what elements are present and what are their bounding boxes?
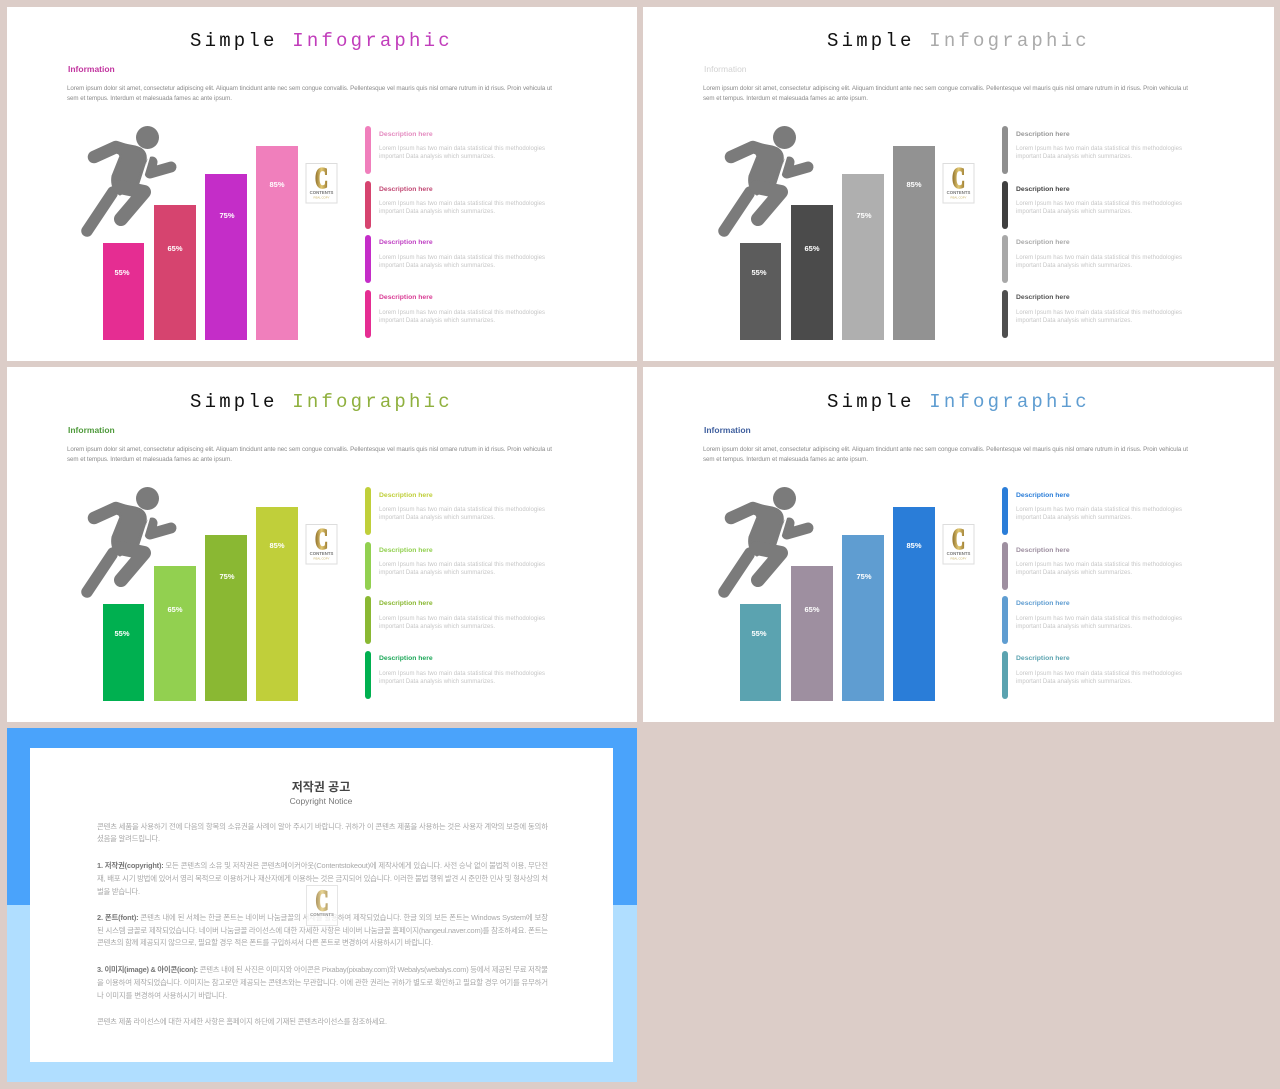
section 2: font: 콘텐츠의 함께 제공되지 않으므로, 필요할 경우 적은 폰트를 구입하셔서 다른 폰트로 변경하여 사용하시기 바랍니다. bbox=[97, 938, 433, 947]
bar: 65%: 65% bbox=[804, 244, 820, 253]
panel: grey infographic bbox=[643, 7, 1274, 361]
section 1: copyright bbox=[97, 861, 548, 896]
logo: CONTENTS bbox=[310, 551, 333, 556]
logo: REAL COPY bbox=[951, 556, 967, 560]
section 3: image and icon: 을 이용하여 제작되었습니다. 이미지는 참고로만 제공되는 콘텐츠와는 무관합니다. 이에 관한 권리는 귀하가 별도로 확인하고 필요할 경우 여기를 유무하거 bbox=[97, 978, 548, 987]
section 3: image and icon: 3. 이미지(image) & 아이콘(icon): 콘텐츠 내에 된 사진은 이미지와 아이콘은 Pixabay(pixabay.com)와 Webalys(webalys.com) 등에서 제공된 무료 저작물 bbox=[97, 965, 548, 974]
description list bbox=[365, 487, 545, 699]
item 1: Lorem Ipsum has two main data statistical this methodologies bbox=[379, 146, 545, 152]
logo: C bbox=[952, 163, 965, 195]
title: Simple Infographic bbox=[190, 30, 453, 52]
item 1: important Data analysis which summarizes. bbox=[379, 515, 495, 521]
section 2: font bbox=[97, 913, 548, 947]
bar: 65%: 65% bbox=[167, 605, 183, 614]
item 1: Description here bbox=[1016, 492, 1070, 499]
bar: 75%: 75% bbox=[219, 211, 235, 220]
item 4 bbox=[1002, 651, 1182, 699]
title: Simple Infographic bbox=[827, 30, 1090, 52]
bar: 75% bbox=[205, 535, 247, 701]
item 3 bbox=[1002, 235, 1182, 283]
item 3: Description here bbox=[379, 239, 433, 246]
item 1: Lorem Ipsum has two main data statistical this methodologies bbox=[1016, 507, 1182, 513]
bar: 65%: 65% bbox=[804, 605, 820, 614]
item 4: Description here bbox=[379, 294, 433, 301]
bar: 85%: 85% bbox=[906, 180, 922, 189]
bar: 65% bbox=[791, 566, 833, 701]
item 2 bbox=[365, 181, 545, 229]
item 4: Lorem Ipsum has two main data statistical this methodologies bbox=[379, 310, 545, 316]
section 2: font: 2. 폰트(font): 콘텐츠 내에 된 서체는 한글 폰트는 네이버 나눔글꼴의 서체를 활용하여 제작되었습니다. 한글 외의 보든 폰트는 Windows System에 보장 bbox=[97, 913, 548, 922]
copyright heading: 저작권 공고 bbox=[292, 779, 350, 794]
item 1: important Data analysis which summarizes. bbox=[1016, 515, 1132, 521]
bar: 55%: 55% bbox=[751, 629, 767, 638]
item 1: Description here bbox=[379, 492, 433, 499]
body text: sem et tempus. Interdum et malesuada fames ac ante ipsum. bbox=[67, 456, 232, 463]
logo: C bbox=[315, 163, 328, 195]
logo bbox=[306, 524, 337, 564]
item 2 bbox=[1002, 542, 1182, 590]
bar: 65% bbox=[154, 566, 196, 701]
logo: CONTENTS bbox=[947, 551, 970, 556]
bar: 65% bbox=[791, 205, 833, 340]
item 4 bbox=[1002, 290, 1182, 338]
bar: 55% bbox=[740, 604, 781, 701]
logo: C bbox=[952, 524, 965, 556]
item 3 bbox=[1002, 596, 1182, 644]
item 2: Lorem Ipsum has two main data statistical this methodologies bbox=[1016, 201, 1182, 207]
item 4: Lorem Ipsum has two main data statistical this methodologies bbox=[1016, 671, 1182, 677]
logo: C bbox=[315, 524, 328, 556]
description list bbox=[1002, 487, 1182, 699]
bar: 75%: 75% bbox=[856, 211, 872, 220]
panel: blue infographic bbox=[643, 367, 1274, 722]
logo bbox=[943, 524, 974, 564]
body text: sem et tempus. Interdum et malesuada fames ac ante ipsum. bbox=[703, 456, 868, 463]
item 1: Description here bbox=[1016, 131, 1070, 138]
copyright subheading: Copyright Notice bbox=[290, 796, 353, 806]
bar: 85% bbox=[893, 146, 935, 340]
bar: 85%: 85% bbox=[906, 541, 922, 550]
item 2: important Data analysis which summarizes. bbox=[379, 570, 495, 576]
body text: Lorem ipsum dolor sit amet, consectetur adipiscing elit. Aliquam tincidunt ante nec sem congue convallis. Pellentesque vel mauris quis nisl ornare rutrum in id risus. Proin vehicula ut bbox=[703, 446, 1188, 453]
item 2: Description here bbox=[379, 547, 433, 554]
body text bbox=[703, 85, 1188, 102]
bar: 75% bbox=[205, 174, 247, 340]
item 3: Description here bbox=[1016, 239, 1070, 246]
item 4: Lorem Ipsum has two main data statistical this methodologies bbox=[1016, 310, 1182, 316]
icon: running figure bbox=[724, 487, 808, 592]
bar: 75% bbox=[842, 174, 884, 340]
closing line: 콘텐츠 제품 라이선스에 대한 자세한 사항은 홈페이지 하단에 기재된 콘텐츠라이선스를 참조하세요. bbox=[97, 1017, 387, 1026]
description list bbox=[365, 126, 545, 338]
logo bbox=[306, 163, 337, 203]
bar: 75% bbox=[842, 535, 884, 701]
item 1 bbox=[365, 487, 545, 535]
item 2: important Data analysis which summarizes. bbox=[1016, 570, 1132, 576]
body text: Lorem ipsum dolor sit amet, consectetur adipiscing elit. Aliquam tincidunt ante nec sem congue convallis. Pellentesque vel mauris quis nisl ornare rutrum in id risus. Proin vehicula ut bbox=[703, 85, 1188, 92]
section 1: copyright: 벌을 받습니다. bbox=[97, 887, 140, 896]
logo: REAL COPY bbox=[314, 196, 330, 200]
description list bbox=[1002, 126, 1182, 338]
intro paragraph: 콘텐츠 세품을 사용하기 전에 다음의 항목의 소유권을 사례이 알아 주시기 바랍니다. 귀하가 이 콘텐츠 제품을 사용하는 것은 사용자 계약의 보증에 동의하 bbox=[97, 822, 548, 831]
panel: pink infographic bbox=[7, 7, 637, 361]
information heading: Information bbox=[68, 425, 115, 435]
item 3: important Data analysis which summarizes. bbox=[1016, 263, 1132, 269]
item 3: Lorem Ipsum has two main data statistical this methodologies bbox=[1016, 616, 1182, 622]
item 2: Description here bbox=[379, 186, 433, 193]
item 3: Lorem Ipsum has two main data statistical this methodologies bbox=[1016, 255, 1182, 261]
item 4 bbox=[365, 651, 545, 699]
item 3: Lorem Ipsum has two main data statistical this methodologies bbox=[379, 255, 545, 261]
item 3 bbox=[365, 596, 545, 644]
intro paragraph: 셨음을 알려드립니다. bbox=[97, 834, 160, 843]
bar: 85% bbox=[893, 507, 935, 701]
bar: 65% bbox=[154, 205, 196, 340]
information heading: Information bbox=[68, 64, 115, 74]
bar chart bbox=[740, 146, 935, 340]
body text: Lorem ipsum dolor sit amet, consectetur adipiscing elit. Aliquam tincidunt ante nec sem congue convallis. Pellentesque vel mauris quis nisl ornare rutrum in id risus. Proin vehicula ut bbox=[67, 85, 552, 92]
item 2: Lorem Ipsum has two main data statistical this methodologies bbox=[379, 201, 545, 207]
bar chart bbox=[103, 146, 298, 340]
bar: 55% bbox=[740, 243, 781, 340]
item 2 bbox=[365, 542, 545, 590]
item 4: Lorem Ipsum has two main data statistical this methodologies bbox=[379, 671, 545, 677]
item 4: Description here bbox=[1016, 294, 1070, 301]
icon: running figure bbox=[87, 126, 171, 231]
bar: 75%: 75% bbox=[856, 572, 872, 581]
logo bbox=[306, 886, 338, 926]
bar: 85% bbox=[256, 507, 298, 701]
logo: CONTENTS bbox=[947, 190, 970, 195]
item 1: Lorem Ipsum has two main data statistical this methodologies bbox=[379, 507, 545, 513]
icon: running figure bbox=[724, 126, 808, 231]
item 2: important Data analysis which summarizes. bbox=[379, 209, 495, 215]
item 1: important Data analysis which summarizes. bbox=[1016, 154, 1132, 160]
item 1: Description here bbox=[379, 131, 433, 138]
item 4: Description here bbox=[1016, 655, 1070, 662]
item 2: Description here bbox=[1016, 547, 1070, 554]
bar: 55%: 55% bbox=[114, 629, 130, 638]
panel: green infographic bbox=[7, 367, 637, 722]
title: Simple Infographic bbox=[827, 391, 1090, 413]
body text: sem et tempus. Interdum et malesuada fames ac ante ipsum. bbox=[703, 95, 868, 102]
intro paragraph bbox=[97, 822, 548, 843]
item 3: important Data analysis which summarizes. bbox=[379, 263, 495, 269]
body text bbox=[67, 85, 552, 102]
bar: 55%: 55% bbox=[114, 268, 130, 277]
item 4: important Data analysis which summarizes. bbox=[1016, 679, 1132, 685]
item 2: Lorem Ipsum has two main data statistical this methodologies bbox=[1016, 562, 1182, 568]
bar: 55%: 55% bbox=[751, 268, 767, 277]
body text: Lorem ipsum dolor sit amet, consectetur adipiscing elit. Aliquam tincidunt ante nec sem congue convallis. Pellentesque vel mauris quis nisl ornare rutrum in id risus. Proin vehicula ut bbox=[67, 446, 552, 453]
bar chart bbox=[740, 507, 935, 701]
item 4: important Data analysis which summarizes. bbox=[1016, 318, 1132, 324]
bar: 75%: 75% bbox=[219, 572, 235, 581]
logo: CONTENTS bbox=[310, 912, 334, 917]
item 1 bbox=[365, 126, 545, 174]
title: Simple Infographic bbox=[190, 391, 453, 413]
item 2: Description here bbox=[1016, 186, 1070, 193]
bar: 85%: 85% bbox=[269, 541, 285, 550]
logo bbox=[943, 163, 974, 203]
bar: 85% bbox=[256, 146, 298, 340]
item 4: important Data analysis which summarizes. bbox=[379, 679, 495, 685]
body text bbox=[703, 446, 1188, 463]
logo: REAL COPY bbox=[314, 556, 330, 560]
information heading: Information bbox=[704, 64, 747, 74]
bar: 55% bbox=[103, 604, 144, 701]
item 3: important Data analysis which summarizes. bbox=[379, 624, 495, 630]
section 3: image and icon bbox=[97, 965, 548, 1000]
item 3 bbox=[365, 235, 545, 283]
item 2: important Data analysis which summarizes. bbox=[1016, 209, 1132, 215]
logo: REAL COPY bbox=[951, 196, 967, 200]
information heading: Information bbox=[704, 425, 751, 435]
item 1: Lorem Ipsum has two main data statistical this methodologies bbox=[1016, 146, 1182, 152]
icon: running figure bbox=[87, 487, 171, 592]
item 2: Lorem Ipsum has two main data statistical this methodologies bbox=[379, 562, 545, 568]
bar: 65%: 65% bbox=[167, 244, 183, 253]
body text: sem et tempus. Interdum et malesuada fames ac ante ipsum. bbox=[67, 95, 232, 102]
section 1: copyright: 1. 저작권(copyright): 모든 콘텐츠의 소유 및 저작권은 콘텐츠메이커아웃(Contentstokeout)에 제작사에게 있습니다. 사전 승낙 없이 불법적 이용, 무단전 bbox=[97, 861, 548, 870]
item 1 bbox=[1002, 126, 1182, 174]
item 4 bbox=[365, 290, 545, 338]
section 1: copyright: 재, 배포 시기 방법에 있어서 영리 목적으로 이용하거나 재산자에게 이용하는 것은 금지되어 있습니다. 이러한 불법 행위 발견 시 준민한 민사 및 형사상의 처 bbox=[97, 874, 548, 883]
item 3: Description here bbox=[379, 600, 433, 607]
bar chart bbox=[103, 507, 298, 701]
item 1: important Data analysis which summarizes. bbox=[379, 154, 495, 160]
body text bbox=[67, 446, 552, 463]
logo: CONTENTS bbox=[310, 190, 333, 195]
item 1 bbox=[1002, 487, 1182, 535]
logo: C bbox=[316, 886, 328, 917]
item 4: important Data analysis which summarizes. bbox=[379, 318, 495, 324]
item 3: important Data analysis which summarizes. bbox=[1016, 624, 1132, 630]
panel: copyright notice bbox=[7, 728, 637, 1082]
section 3: image and icon: 나 이미지를 변경하여 사용하시기 바랍니다. bbox=[97, 991, 227, 1000]
bar: 55% bbox=[103, 243, 144, 340]
section 2: font: 된 시스템 글꼴로 제작되었습니다. 네이버 나눔글꼴 라이선스에 대한 자세한 사항은 네이버 나눔글꼴 홈페이지(hangeul.naver.com)를 참조하세요. 폰트는 bbox=[97, 926, 548, 935]
item 3: Description here bbox=[1016, 600, 1070, 607]
item 4: Description here bbox=[379, 655, 433, 662]
bar: 85%: 85% bbox=[269, 180, 285, 189]
item 2 bbox=[1002, 181, 1182, 229]
item 3: Lorem Ipsum has two main data statistical this methodologies bbox=[379, 616, 545, 622]
